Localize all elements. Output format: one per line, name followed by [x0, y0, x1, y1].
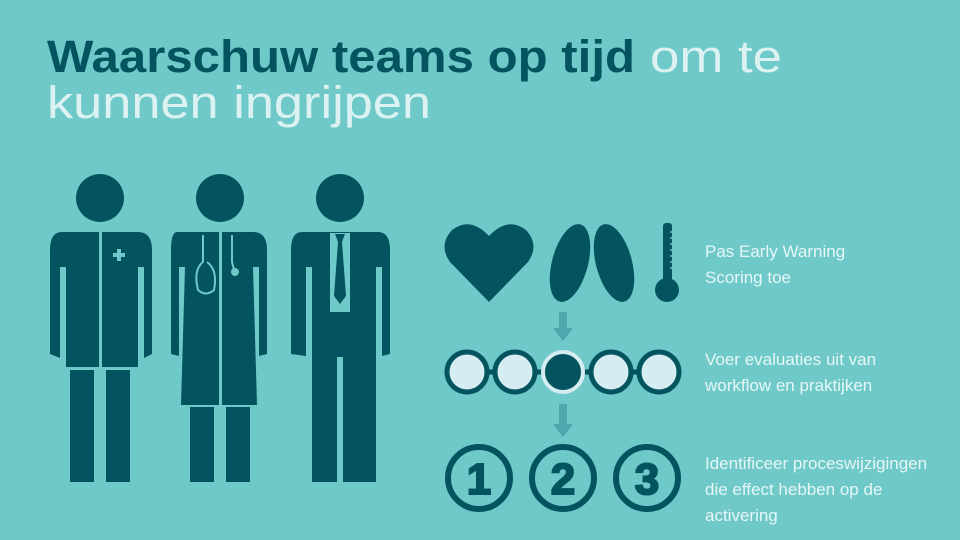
- figure: nurse: [50, 174, 152, 482]
- title: Waarschuw teams op tijd: [47, 31, 635, 82]
- text: step 1: [705, 242, 845, 287]
- numbered circles: 1: [467, 455, 491, 504]
- text: step 2: workflow en praktijken: [704, 376, 872, 395]
- text: step 3: die effect hebben op de: [705, 480, 882, 499]
- icon: lungs: [542, 220, 642, 306]
- icon: thermometer: [655, 223, 679, 302]
- text: step 2: [704, 350, 876, 395]
- figure: doctor: [171, 174, 267, 482]
- title: kunnen ingrijpen: [47, 77, 431, 128]
- text: step 3: activering: [705, 506, 778, 525]
- arrow 2: [553, 404, 573, 437]
- title: [47, 31, 782, 128]
- circle row: [447, 352, 679, 392]
- numbered circles: 3: [635, 455, 659, 504]
- title: om te: [650, 31, 782, 82]
- text: step 3: [705, 454, 927, 525]
- icon: heart: [444, 224, 534, 302]
- numbered circles: 2: [551, 455, 575, 504]
- text: step 1: Scoring toe: [705, 268, 791, 287]
- text: step 3: Identificeer proceswijzigingen: [705, 454, 927, 473]
- figure: businessman: [291, 174, 390, 482]
- text: step 2: Voer evaluaties uit van: [705, 350, 876, 369]
- numbered circles: [448, 447, 678, 509]
- arrow 1: [553, 312, 573, 341]
- text: step 1: Pas Early Warning: [705, 242, 845, 261]
